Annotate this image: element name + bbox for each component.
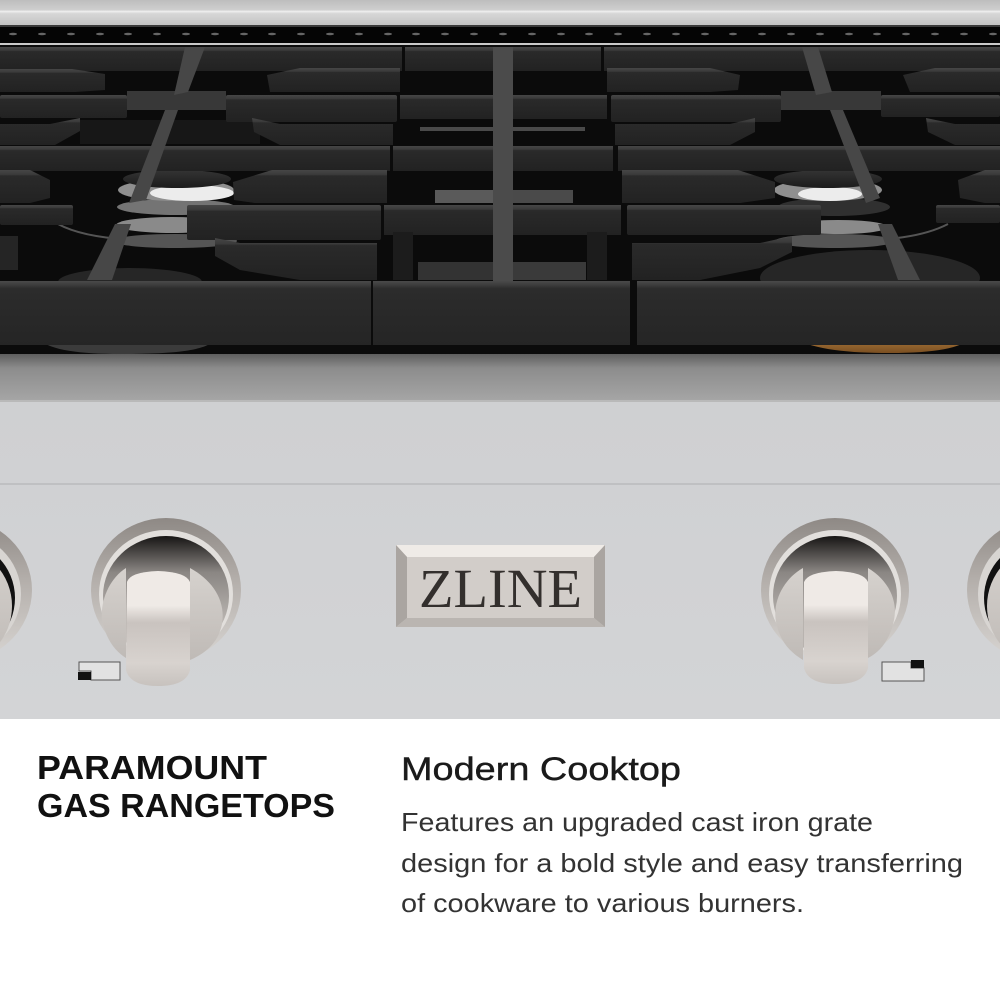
knob: far right [967,518,1000,664]
badge: ZLINE nameplate [396,545,605,627]
mode icon: left [78,662,120,680]
knob: left [91,518,241,686]
brass burner under front bar [793,338,970,353]
photo: cooktop [0,0,1000,719]
backsplash strip [0,0,1000,27]
left burner glimpse under front bar [40,340,215,354]
rear vent with rivets [0,27,1000,45]
body text: design for a bold style and easy transferring [401,848,963,878]
front control panel [0,400,1000,719]
heading: Paramount Gas Rangetops: PARAMOUNT [37,749,267,786]
grate: left [0,47,402,345]
burner: right [774,170,948,248]
knob: right [761,518,909,684]
heading: Paramount Gas Rangetops: GAS RANGETOPS [37,787,335,824]
body text: of cookware to various burners. [401,888,804,918]
grate: centre [373,47,630,345]
grate: right [604,47,1000,345]
burner: left [58,170,237,248]
stainless deck [0,354,1000,401]
heading: Paramount Gas Rangetops [37,749,335,824]
knob: far left [0,518,32,664]
subheading: Modern Cooktop: Modern Cooktop [401,751,681,787]
body text: Features an upgraded cast iron grate [401,807,873,837]
well details under grates [58,120,980,306]
badge: ZLINE nameplate: ZLINE [419,558,582,619]
body text [401,807,963,918]
caption background [0,719,1000,1000]
burner well background [0,45,1000,354]
mode icon: right [882,660,924,681]
